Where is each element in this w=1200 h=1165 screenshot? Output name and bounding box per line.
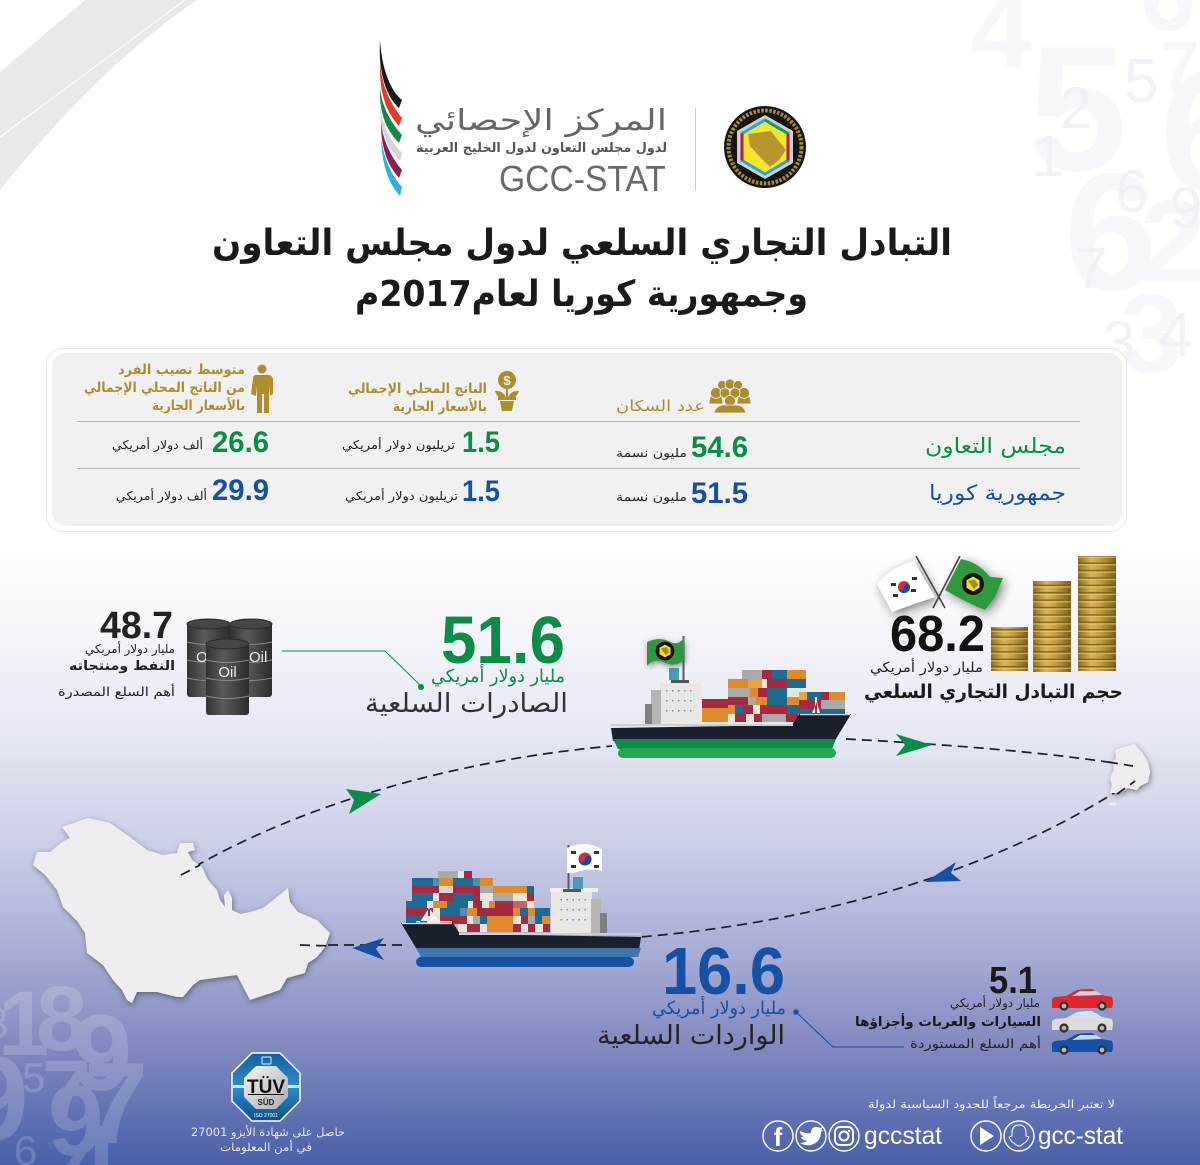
icon: GCC emblem [724,106,806,188]
stat: car imports: السيارات والعربات وأجزاؤها [855,1013,1041,1030]
stat: oil exports: أهم السلع المصدرة [58,683,175,700]
watermark numbers top right: 5 [1028,9,1127,208]
arrow: exports to Korea [896,734,932,756]
stat: imports [597,934,786,1051]
arrow: imports from Korea [925,862,961,882]
header: GDP per capita: بالأسعار الجارية [152,397,245,414]
icon: crowd [709,379,751,413]
row: GCC: ألف دولار أمريكي [112,437,203,453]
icon: youtube [971,1121,1001,1151]
watermark numbers bottom left [0,968,148,1165]
header: GDP per capita [84,362,273,414]
row: Korea: ألف دولار أمريكي [116,488,207,504]
stat: total trade: مليار دولار أمريكي [870,658,983,676]
title [212,223,952,315]
icon: facebook [763,1121,793,1152]
icon: money plant: $ [503,373,511,388]
stat: oil exports: مليار دولار أمريكي [85,641,175,657]
watermark numbers top right: 6 [1115,158,1148,225]
title: وجمهورية كوريا لعام2017م [355,274,808,315]
stat: car imports: أهم السلع المستوردة [910,1035,1041,1052]
badge: TUV SUD: SÜD [258,1098,275,1107]
watermark numbers top right [970,0,1200,396]
icon: crossed flags [877,556,1003,612]
icon: oil barrels: Oil [218,664,237,681]
watermark numbers top right: 3 [1120,271,1182,396]
title: التبادل التجاري السلعي لدول مجلس التعاون [212,223,952,264]
stat: total trade: حجم التبادل التجاري السلعي [864,681,1123,704]
row: Korea: 1.5 [462,475,500,508]
ship: exports [611,636,851,758]
watermark numbers top right: 7 [1075,236,1107,301]
logo: GCC-STAT [380,40,806,199]
row: GCC: مجلس التعاون [925,434,1066,458]
arrow: imports to GCC [352,938,384,960]
icon: twitter [796,1121,826,1151]
row: Korea [116,474,1066,510]
icon: facebook: f [774,1122,783,1152]
connector: imports to cars [793,1009,904,1047]
stat: car imports: مليار دولار أمريكي [950,995,1040,1011]
icon: money plant [495,371,519,411]
population label: عدد السكان [616,397,705,415]
watermark numbers top right: 3 [1103,310,1135,375]
map: Arabian peninsula GCC [33,818,330,1003]
watermark numbers bottom left: 5 [22,1054,45,1101]
icon: Korea flag on ship [567,844,602,873]
row: GCC: مليون نسمة [616,446,687,461]
map: Korea [1109,744,1150,806]
icon: coin stacks [991,556,1116,672]
watermark numbers top right: 7 [1160,27,1199,105]
icon: person [251,364,273,413]
icon: colored ribbon [380,40,402,196]
stat: car imports: 5.1 [989,960,1037,1002]
header: GDP: بالأسعار الجارية [393,398,487,415]
social media handles [763,1121,1123,1152]
handle: gccstat: gccstat [864,1122,942,1150]
badge: TUV SUD: TÜV [247,1077,285,1098]
logo Latin name: GCC-STAT [499,158,666,199]
icon: oil barrels: O [196,649,208,666]
row: GCC: 54.6 [691,431,748,464]
watermark numbers bottom left: 9 [72,992,132,1113]
stat: exports: 51.6 [441,603,565,678]
row: Korea: جمهورية كوريا [929,481,1066,505]
certificate caption [191,1125,345,1155]
stat: imports: الواردات السلعية [597,1021,785,1051]
stat: oil exports: النفط ومنتجاته [69,659,175,674]
certificate caption: في أمن المعلومات [220,1139,312,1155]
watermark numbers top right: 2 [1060,76,1092,141]
certificate caption: حاصل على شهادة الأيزو 27001 [191,1125,345,1140]
logo divider [695,108,696,191]
row: GCC: 26.6 [212,426,269,459]
GDP label: الناتج المحلي الإجمالي [348,381,487,397]
header: population [616,379,751,415]
row: Korea: 51.5 [691,477,748,510]
route: dashed trade curves [181,739,1134,945]
logo Arabic name: المركز الإحصائي [415,103,667,138]
connector: exports to oil [282,651,424,690]
row: GCC: تريليون دولار أمريكي [342,437,455,453]
watermark numbers top right: 1 [1032,124,1064,189]
badge: TUV SUD: ISO 27001 [254,1113,278,1119]
header: GDP per capita: من الناتج المحلي الإجمالي [84,380,245,396]
icon: oil barrels: Oil [249,649,267,666]
watermark numbers bottom left: 7 [42,1042,91,1141]
badge: TUV SUD [232,1053,300,1121]
stat: oil exports [58,605,175,700]
header: GDP [348,371,519,415]
row: Korea: 29.9 [212,474,269,507]
stat: car imports [855,960,1041,1052]
ship: imports [401,844,641,967]
decorative corner swoosh [0,0,197,190]
stat: imports: مليار دولار أمريكي [652,996,786,1019]
icon: snapchat [1004,1121,1034,1151]
icon: GCC flag on ship [647,638,684,666]
icon: three cars [1052,989,1113,1055]
stat: exports: مليار دولار أمريكي [431,664,565,687]
icon: oil barrels [187,619,272,715]
stat: exports [365,603,568,719]
stat: exports: الصادرات السلعية [365,689,568,719]
watermark numbers top right: 4 [1158,301,1192,370]
row: GCC [112,426,1066,464]
route: dashes over the maps [181,762,1135,946]
row: GCC: 1.5 [462,426,500,459]
watermark numbers top right: 5 [1124,47,1158,116]
row: Korea: تريليون دولار أمريكي [345,488,458,504]
stat: total trade: 68.2 [890,605,985,662]
handle: gcc-stat: gcc-stat [1038,1122,1123,1150]
arrow: exports from GCC [346,789,381,814]
stat: oil exports: 48.7 [100,605,173,647]
watermark numbers top right: 6 [1064,138,1157,326]
row: Korea: مليون نسمة [616,490,687,505]
watermark numbers bottom left: 8 [36,968,87,1070]
stat: imports: 16.6 [662,934,785,1009]
panel: indicators table [46,348,1126,532]
logo Arabic subtitle: لدول مجلس التعاون لدول الخليج العربية [416,141,667,156]
stat: total trade [864,605,1123,704]
icon: instagram [829,1121,859,1151]
map disclaimer: لا تعتبر الخريطة مرجعاً للحدود السياسية لدولة [868,1095,1115,1112]
watermark numbers bottom left: 7 [84,1040,148,1165]
per capita label: متوسط نصيب الفرد [118,362,245,378]
